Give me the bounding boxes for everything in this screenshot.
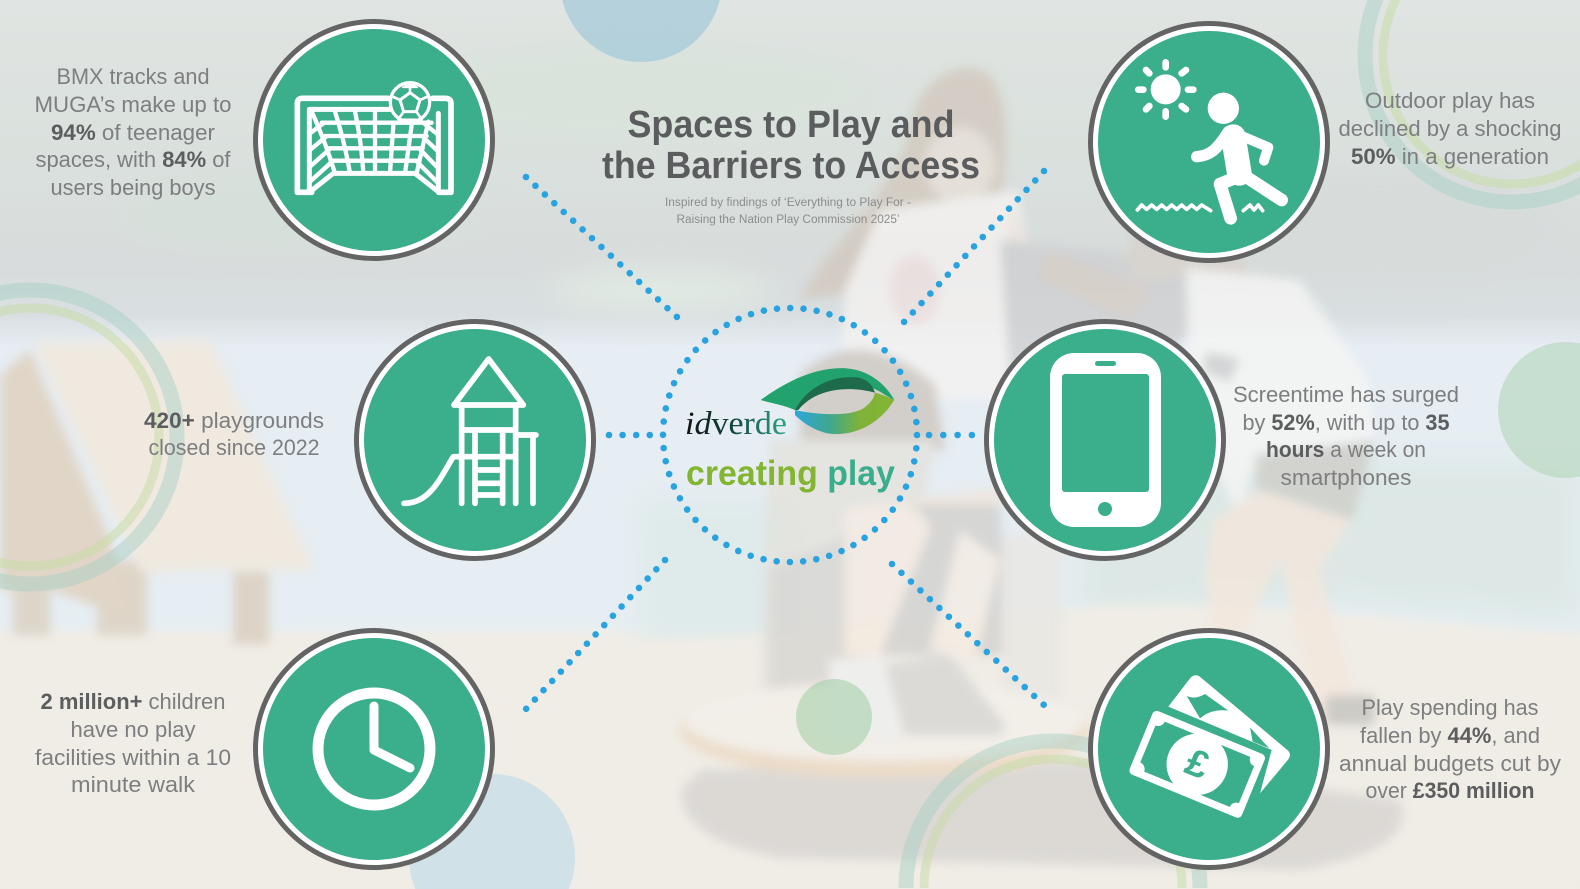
title: Spaces to Play and bbox=[628, 104, 954, 146]
text: spending stat: Play spending has bbox=[1362, 695, 1538, 720]
subtitle: Inspired by findings of ‘Everything to Play For - bbox=[665, 197, 911, 209]
text: walking distance stat bbox=[35, 689, 231, 797]
text: outdoor play stat bbox=[1338, 88, 1562, 169]
dotted connector lines and central ring bbox=[526, 171, 1044, 709]
text: spending stat bbox=[1339, 695, 1561, 803]
text: BMX tracks stat: spaces, with 84% of bbox=[36, 147, 231, 172]
text: screentime stat: by 52%, with up to 35 bbox=[1242, 410, 1450, 435]
girl bbox=[800, 68, 1007, 300]
text: BMX tracks stat bbox=[34, 64, 232, 200]
icon: child running in the sun bbox=[1090, 24, 1328, 260]
text: BMX tracks stat: MUGA’s make up to bbox=[34, 92, 232, 117]
title bbox=[602, 104, 980, 187]
text: spending stat: over £350 million bbox=[1366, 778, 1534, 803]
text: outdoor play stat: declined by a shocking bbox=[1338, 116, 1562, 141]
text: spending stat: annual budgets cut by bbox=[1339, 751, 1561, 776]
logo: idverde creating play: creating play bbox=[686, 454, 896, 493]
carousel bbox=[681, 760, 1403, 870]
text: spending stat: fallen by 44%, and bbox=[1360, 723, 1540, 748]
middle child bbox=[800, 350, 945, 450]
text: outdoor play stat: 50% in a generation bbox=[1351, 144, 1549, 169]
icon: clock bbox=[256, 630, 492, 868]
text: screentime stat: Screentime has surged bbox=[1233, 382, 1459, 407]
text: walking distance stat: 2 million+ children bbox=[40, 689, 226, 714]
text: outdoor play stat: Outdoor play has bbox=[1365, 88, 1535, 113]
text: playgrounds stat: 420+ playgrounds bbox=[144, 408, 324, 433]
subtitle: Raising the Nation Play Commission 2025’ bbox=[676, 214, 900, 226]
text: screentime stat: smartphones bbox=[1280, 465, 1412, 490]
icon: football goal bbox=[256, 22, 492, 258]
icon: smartphone bbox=[986, 322, 1224, 558]
text: screentime stat bbox=[1233, 382, 1459, 490]
text: playgrounds stat: closed since 2022 bbox=[148, 435, 320, 460]
playhouse bbox=[13, 527, 50, 635]
text: walking distance stat: facilities within a 10 bbox=[35, 745, 231, 770]
title: the Barriers to Access bbox=[602, 145, 980, 187]
text: walking distance stat: minute walk bbox=[71, 772, 196, 797]
text: playgrounds stat bbox=[144, 408, 324, 460]
boy bbox=[1130, 220, 1250, 280]
subtitle bbox=[665, 197, 911, 226]
icon: pound banknotes bbox=[1090, 630, 1328, 868]
icon: playground tower and slide bbox=[356, 322, 594, 558]
text: BMX tracks stat: BMX tracks and bbox=[56, 64, 210, 89]
text: BMX tracks stat: users being boys bbox=[50, 175, 216, 200]
dark child bbox=[1000, 240, 1210, 380]
text: screentime stat: hours a week on bbox=[1266, 437, 1426, 462]
text: walking distance stat: have no play bbox=[70, 717, 196, 742]
text: BMX tracks stat: 94% of teenager bbox=[51, 120, 215, 145]
logo: idverde creating play: idverde bbox=[685, 406, 787, 442]
icon: pound banknotes: £ bbox=[1179, 740, 1215, 788]
logo: idverde creating play bbox=[685, 368, 896, 493]
